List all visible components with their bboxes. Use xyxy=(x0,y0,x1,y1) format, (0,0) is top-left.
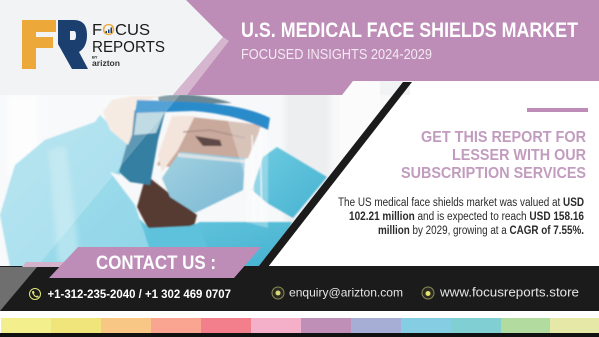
right sleeve xyxy=(252,147,327,218)
visor headband xyxy=(135,100,270,130)
neck xyxy=(137,175,197,232)
mask xyxy=(162,152,245,213)
market summary text: 102.21 million and is expected to reach USD 158.16 xyxy=(349,211,584,223)
market summary text: The US medical face shields market was valued at USD xyxy=(338,197,584,209)
footer grey triangle xyxy=(0,267,37,311)
accent bar xyxy=(527,108,588,112)
website address: www.focusreports.store xyxy=(439,284,579,300)
translucent diagonal overlay xyxy=(0,95,180,267)
contact ribbon xyxy=(49,247,261,278)
logo: arizton xyxy=(92,59,120,68)
icon: phone xyxy=(30,288,40,300)
logo wordmark: FOCUS xyxy=(92,22,150,39)
subscription heading: GET THIS REPORT FOR xyxy=(421,129,586,146)
subscription heading: LESSER WITH OUR xyxy=(452,147,586,164)
contact ribbon shadow strip xyxy=(22,262,66,267)
market summary text xyxy=(338,197,584,237)
footer dark bar xyxy=(0,266,599,311)
photo: medical worker adjusting a face shield xyxy=(0,81,420,267)
hand xyxy=(103,96,160,145)
head top xyxy=(158,95,232,105)
phone numbers: +1-312-235-2040 / +1 302 469 0707 xyxy=(48,289,231,301)
logo xyxy=(22,20,165,69)
shield xyxy=(225,112,268,228)
icon: email xyxy=(272,287,284,299)
subscription heading xyxy=(401,129,586,182)
contact ribbon: CONTACT US : xyxy=(96,253,216,274)
diagonal black stripe xyxy=(258,82,412,267)
header purple banner xyxy=(173,0,599,95)
subtitle: FOCUSED INSIGHTS 2024-2029 xyxy=(241,47,432,63)
icon: website xyxy=(422,287,434,299)
logo R xyxy=(58,20,88,69)
logo: REPORTS xyxy=(92,39,165,56)
logo F xyxy=(22,20,56,69)
chest gown xyxy=(139,218,292,266)
header chevron accent xyxy=(173,37,229,95)
color strip xyxy=(1,318,599,333)
hair cap xyxy=(119,110,165,185)
left arm gown xyxy=(0,115,150,267)
face xyxy=(157,116,262,172)
logo mini bars xyxy=(106,28,112,33)
header light panel xyxy=(0,0,410,95)
bottom black edge xyxy=(0,333,599,337)
market summary text: million by 2029, growing at a CAGR of 7.55%. xyxy=(378,225,584,237)
logo: BY xyxy=(92,54,98,60)
email address: enquiry@arizton.com xyxy=(289,286,403,300)
